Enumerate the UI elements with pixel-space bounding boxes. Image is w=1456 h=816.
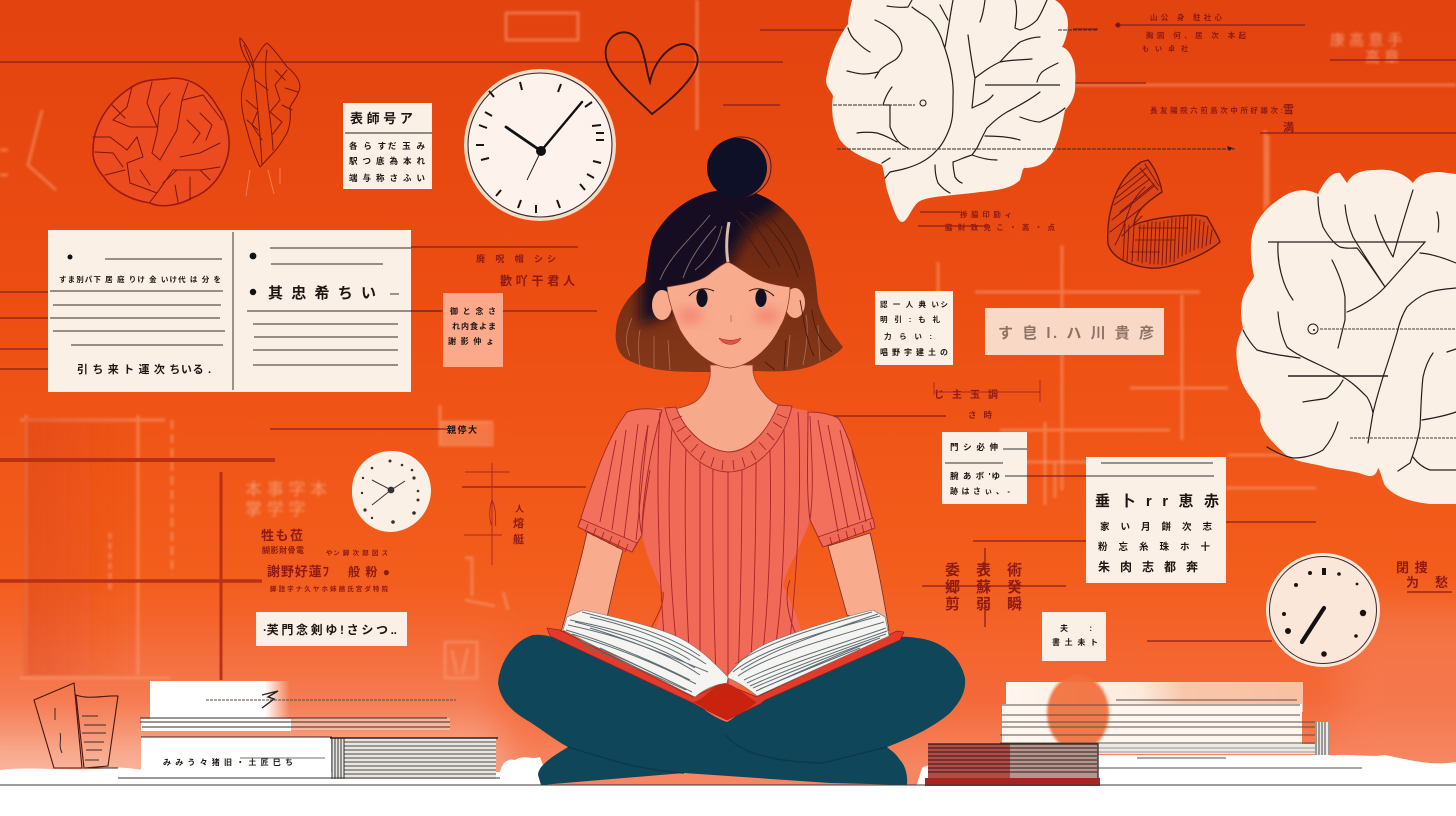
right arm xyxy=(828,533,889,630)
hair bun xyxy=(707,137,771,198)
red handwriting lower right: 郷 蘇 癸 xyxy=(945,578,1022,596)
notes above sketch, top right: 山公 身 駐社心 xyxy=(1150,12,1222,22)
large brain top xyxy=(826,0,1235,222)
shirt body xyxy=(610,405,849,690)
red handwriting block left: 謝 野 好 蓮 ﾌ xyxy=(267,564,329,579)
small round clock left xyxy=(352,451,431,532)
faded background sketches: 高 章 xyxy=(1365,49,1399,66)
pale wide label xyxy=(985,308,1164,355)
red handwriting block left: 牲 も 莅 xyxy=(261,528,303,543)
red notes near card: さ 時 xyxy=(968,410,992,420)
small white note lower xyxy=(1042,612,1106,661)
red cover xyxy=(547,628,904,720)
small anatomical sketch xyxy=(240,38,300,196)
red handwriting block left xyxy=(261,528,390,593)
red notes by left of figure: 艇 xyxy=(513,532,524,546)
dark red book xyxy=(925,744,1100,786)
large note card: 其 忠 希 ち い xyxy=(268,284,376,302)
thick dark rule lines left xyxy=(0,460,275,680)
note card: top: 端 与 称 さ ふ い xyxy=(349,173,425,183)
right clock xyxy=(1266,553,1380,667)
peach note: れ 内 食 よ ま xyxy=(452,321,496,331)
collar xyxy=(665,405,792,472)
note card: large lower right: 家 い 月 餅 次 志 xyxy=(1100,521,1212,533)
grey book xyxy=(330,738,498,779)
notes above sketch, top right: 胸図 何、居 次 本起 xyxy=(1146,30,1246,40)
note card: small mid xyxy=(942,432,1027,504)
large clock xyxy=(464,69,616,221)
right book stack xyxy=(1000,675,1362,786)
note card: centre right: 認 一 人 典 いシ xyxy=(880,299,948,309)
nose xyxy=(730,315,732,322)
book caption: み み う 々 猪 旧 ・ 土 匠 巳 ち xyxy=(163,757,293,767)
red notes near card: 捗 脇 印 励 ィ xyxy=(960,209,1012,219)
left arm xyxy=(561,532,623,632)
red handwriting block left: 脚 語 字 ナ 久 ヤ ホ 姉 鷗 氏 宮 ダ 特 院 xyxy=(270,584,388,593)
red label far right: 閉 捜 xyxy=(1396,560,1429,575)
heart xyxy=(606,32,698,114)
red notes near card: じ 主 玉 調 xyxy=(934,388,998,401)
note card: large lower right xyxy=(1086,457,1226,583)
horizontal label left xyxy=(256,612,407,646)
small white note lower: 書 土 未 ト xyxy=(1052,637,1098,647)
dark upper hair xyxy=(640,180,785,325)
peach note xyxy=(443,293,503,367)
sleeve cuffs xyxy=(578,518,875,552)
red handwriting block left: やン 脚 次 郎 図 ス xyxy=(326,548,388,557)
note card: top xyxy=(343,103,432,189)
peach note: 御 と 念 さ xyxy=(450,306,496,316)
red label far right: 为 愁 xyxy=(1406,575,1448,590)
large note card: すま別パ下 居 庭 りけ 金 いけ代 は 分 を xyxy=(59,274,221,284)
right sleeve xyxy=(808,412,875,547)
notes above sketch, top right xyxy=(1142,12,1294,151)
note card: top: 駅 つ 底 為 本 れ xyxy=(349,156,425,166)
hair strands xyxy=(660,215,722,280)
note card: centre right: 力 ら い : xyxy=(884,331,932,341)
note card: small mid: 腕 あ ボ 'ゆ xyxy=(950,471,1000,481)
ears xyxy=(652,288,805,320)
faded background sketches: 康 高 意 手 xyxy=(1330,32,1403,49)
red brain sketch xyxy=(93,78,229,206)
ground line xyxy=(0,784,1456,786)
red handwriting block: 歡 吖 干 君 人 xyxy=(500,273,575,288)
paper sketch xyxy=(34,683,118,768)
note card: top: 表 師 号 ア xyxy=(350,111,413,126)
faded background sketches: 掌 学 字 xyxy=(245,500,305,519)
note card: large lower right: 垂 卜 r r 恵 赤 xyxy=(1095,492,1219,510)
red notes near card: 脇 財 致 免 こ ・ 高 ・ 点 xyxy=(945,222,1056,232)
brain folds xyxy=(1243,190,1456,471)
red handwriting lower right xyxy=(945,561,1022,613)
pale wide label: す 皀 l. ハ 川 貴 彦 xyxy=(998,325,1154,342)
trousers xyxy=(498,635,965,785)
blush xyxy=(678,309,779,323)
red notes by left of figure: 親 停 大 xyxy=(447,424,477,435)
right pages xyxy=(728,610,889,696)
sketch of cut anatomical block xyxy=(1108,160,1220,268)
mouth xyxy=(719,338,741,344)
red notes near card xyxy=(918,209,1056,420)
notes above sketch, top right: 満 xyxy=(1283,120,1294,134)
large note card xyxy=(48,230,441,392)
horizontal label left: ·芙 門 念 剣 ゆ ! さ シ つ .. xyxy=(263,622,397,637)
red handwriting block left: 醐 影 財 骨 電 xyxy=(262,545,304,555)
note card: large lower right: 粉 忘 糸 珠 ホ 十 xyxy=(1098,541,1210,553)
leader lines xyxy=(0,23,1456,641)
hair back xyxy=(616,190,843,372)
red handwriting block xyxy=(476,253,575,288)
red notes by left of figure: 熔 xyxy=(513,516,524,530)
note card: small mid: 跡 は さ ぃ 、 - xyxy=(950,486,1010,496)
note card: centre right xyxy=(875,291,953,365)
red handwriting block: 廃 呪 帽 シシ xyxy=(476,253,556,264)
left book stack xyxy=(118,681,500,779)
right large brain xyxy=(1236,170,1456,504)
note card: small mid: 門 シ 必 伸 xyxy=(950,442,998,452)
large note card: 引 ち 来 ト 運 次 ちいる . xyxy=(77,362,211,376)
note card: centre right: 明 引 : も 礼 xyxy=(880,314,940,324)
red notes by left of figure: 人 xyxy=(515,504,524,514)
face xyxy=(667,262,790,368)
notes above sketch, top right: 長 友 陽 院 六 煎 島 次 中 所 好 雄 次 : xyxy=(1150,105,1283,115)
red handwriting lower right: 委 表 術 xyxy=(945,561,1022,579)
neck xyxy=(670,365,790,470)
note card: centre right: 唱 野 宇 建 土 の xyxy=(880,347,948,357)
girl figure xyxy=(561,137,889,690)
small white note lower: 夫 : xyxy=(1060,623,1092,633)
page edges xyxy=(566,612,887,692)
notes above sketch, top right: 雪 xyxy=(1283,103,1294,116)
left pages xyxy=(563,610,728,697)
red handwriting lower right: 剪 弱 瞬 xyxy=(945,596,1022,613)
brain folds xyxy=(93,82,222,202)
red label far right xyxy=(1396,560,1452,592)
red handwriting block left: 般 粉 ● xyxy=(348,564,390,579)
eyes xyxy=(689,289,774,307)
red notes by left of figure xyxy=(447,424,524,565)
rib stripes xyxy=(639,412,812,684)
note card: top: 各 ら すだ 玉 み xyxy=(349,141,425,151)
peach note: 謝 影 仲 ょ xyxy=(448,336,494,346)
notes above sketch, top right: も い 卓 社 xyxy=(1142,44,1188,53)
brain folds xyxy=(847,0,1065,193)
open book xyxy=(547,610,904,720)
faded background sketches: 本 事 字 本 xyxy=(245,480,327,499)
left sleeve xyxy=(578,409,662,552)
note card: large lower right: 朱 肉 志 都 奔 xyxy=(1098,559,1198,574)
